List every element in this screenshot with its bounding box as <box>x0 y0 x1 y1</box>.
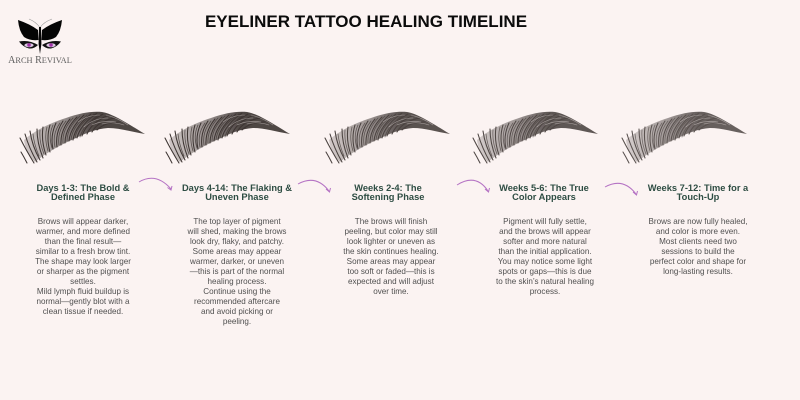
panel: weeks 7-12 <box>622 112 748 276</box>
heading: days 4-14 <box>182 183 292 202</box>
panel: days 1-3 <box>20 112 145 316</box>
arrow: phase 1 to 2 <box>138 178 172 191</box>
text: days 4-14 description: peeling. <box>223 317 251 326</box>
arrow: phase 3 to 4 <box>456 180 490 193</box>
heading: weeks 7-12: Weeks 7-12: Time for a <box>648 183 748 193</box>
text: days 4-14 description: —this is part of the normal <box>190 267 284 276</box>
text: days 4-14 description: look dry, flaky, and patchy. <box>190 237 284 246</box>
logo wordmark: ARCH REVIVAL <box>8 55 72 66</box>
text: days 1-3 description: clean tissue if needed. <box>43 307 123 316</box>
text: days 1-3 description: The shape may look larger <box>35 257 131 266</box>
text: weeks 5-6 description: You may notice some light <box>498 257 592 266</box>
text: weeks 2-4 description: peeling, but color may still <box>344 227 438 236</box>
heading: weeks 5-6 <box>499 183 589 202</box>
panel: weeks 5-6 <box>472 112 598 296</box>
heading: days 1-3 <box>36 183 130 202</box>
text: weeks 7-12 description: sessions to build the <box>661 247 735 256</box>
text: weeks 2-4 description: too soft or faded—this is <box>347 267 435 276</box>
text: weeks 7-12 description: and color is more even. <box>656 227 740 236</box>
text: days 4-14 description: and avoid picking or <box>201 307 273 316</box>
arrow: phase 4 to 5 <box>604 182 638 196</box>
text: days 1-3 description: or sharper as the pigment <box>37 267 129 276</box>
logo: Arch Revival <box>8 18 72 66</box>
icon: eyebrow <box>20 112 145 164</box>
text: weeks 5-6 description: Pigment will fully settle, <box>503 216 587 226</box>
text: weeks 5-6 description: and the brows will appear <box>499 227 591 236</box>
arrow: phase 2 to 3 <box>298 180 331 193</box>
heading: days 4-14: Uneven Phase <box>205 192 269 202</box>
heading: days 1-3: Days 1-3: The Bold & <box>36 183 130 193</box>
text: days 1-3 description: warmer, and more defined <box>36 227 130 236</box>
icon: eyebrow <box>472 112 598 164</box>
text: weeks 5-6 description: than the initial application. <box>498 247 592 256</box>
text: weeks 2-4 description: expected and will adjust <box>348 277 434 286</box>
text: weeks 7-12 description: Brows are now fully healed, <box>648 216 747 226</box>
text: weeks 7-12 description: long-lasting results. <box>663 267 733 276</box>
heading: days 1-3: Defined Phase <box>51 192 115 202</box>
heading: weeks 2-4 <box>352 183 424 202</box>
heading: weeks 5-6: Color Appears <box>512 192 576 202</box>
text: weeks 5-6 description: process. <box>530 287 560 296</box>
text: weeks 2-4 description: Some areas may appear <box>347 257 435 266</box>
heading: weeks 5-6: Weeks 5-6: The True <box>499 183 589 193</box>
heading: weeks 2-4: Softening Phase <box>352 192 424 202</box>
text: days 4-14 description: Continue using the <box>203 287 271 296</box>
heading: weeks 7-12 <box>648 183 748 202</box>
text: weeks 5-6 description: softer and more natural <box>503 237 587 246</box>
text: days 4-14 description <box>188 216 286 326</box>
text: days 4-14 description: The top layer of pigment <box>193 216 281 226</box>
heading: weeks 7-12: Touch-Up <box>677 192 719 202</box>
heading: days 4-14: Days 4-14: The Flaking & <box>182 183 292 193</box>
icon: eyebrow <box>324 112 450 164</box>
text: weeks 2-4 description: look lighter or uneven as <box>347 237 435 246</box>
text: days 1-3 description: similar to a fresh brow tint. <box>36 247 130 256</box>
text: days 1-3 description: settles. <box>70 277 96 286</box>
icon: eyebrow <box>164 112 290 164</box>
text: weeks 7-12 description: Most clients need two <box>659 237 737 246</box>
text: weeks 7-12 description: perfect color and shape for <box>650 257 746 266</box>
text: weeks 5-6 description: spots or gaps—this is due <box>498 267 592 276</box>
text: weeks 5-6 description: to the skin’s natural healing <box>496 277 594 286</box>
text: days 1-3 description: than the final result— <box>45 237 121 246</box>
text: days 4-14 description: will shed, making the brows <box>188 227 286 236</box>
text: weeks 7-12 description <box>648 216 747 276</box>
text: days 1-3 description: Mild lymph fluid buildup is <box>37 287 129 296</box>
text: days 1-3 description: normal—gently blot with a <box>36 297 130 306</box>
title: EYELINER TATTOO HEALING TIMELINE <box>205 12 527 31</box>
icon: butterfly with eyes <box>18 18 62 54</box>
text: weeks 5-6 description <box>496 216 594 296</box>
text: days 4-14 description: healing process. <box>208 277 266 286</box>
text: days 4-14 description: recommended aftercare <box>194 297 280 306</box>
text: days 1-3 description: Brows will appear darker, <box>38 216 128 226</box>
heading: weeks 2-4: Weeks 2-4: The <box>354 183 422 193</box>
text: days 4-14 description: Some areas may appear <box>193 247 281 256</box>
text: weeks 2-4 description: The brows will finish <box>355 216 427 226</box>
panel: days 4-14 <box>164 112 292 326</box>
icon: eyebrow <box>622 112 747 164</box>
text: weeks 2-4 description <box>343 216 439 296</box>
text: days 4-14 description: warmer, darker, or uneven <box>190 257 284 266</box>
text: weeks 2-4 description: the skin continues healing. <box>343 247 439 256</box>
text: weeks 2-4 description: over time. <box>373 287 409 296</box>
panel: weeks 2-4 <box>324 112 450 296</box>
text: days 1-3 description <box>35 216 131 316</box>
